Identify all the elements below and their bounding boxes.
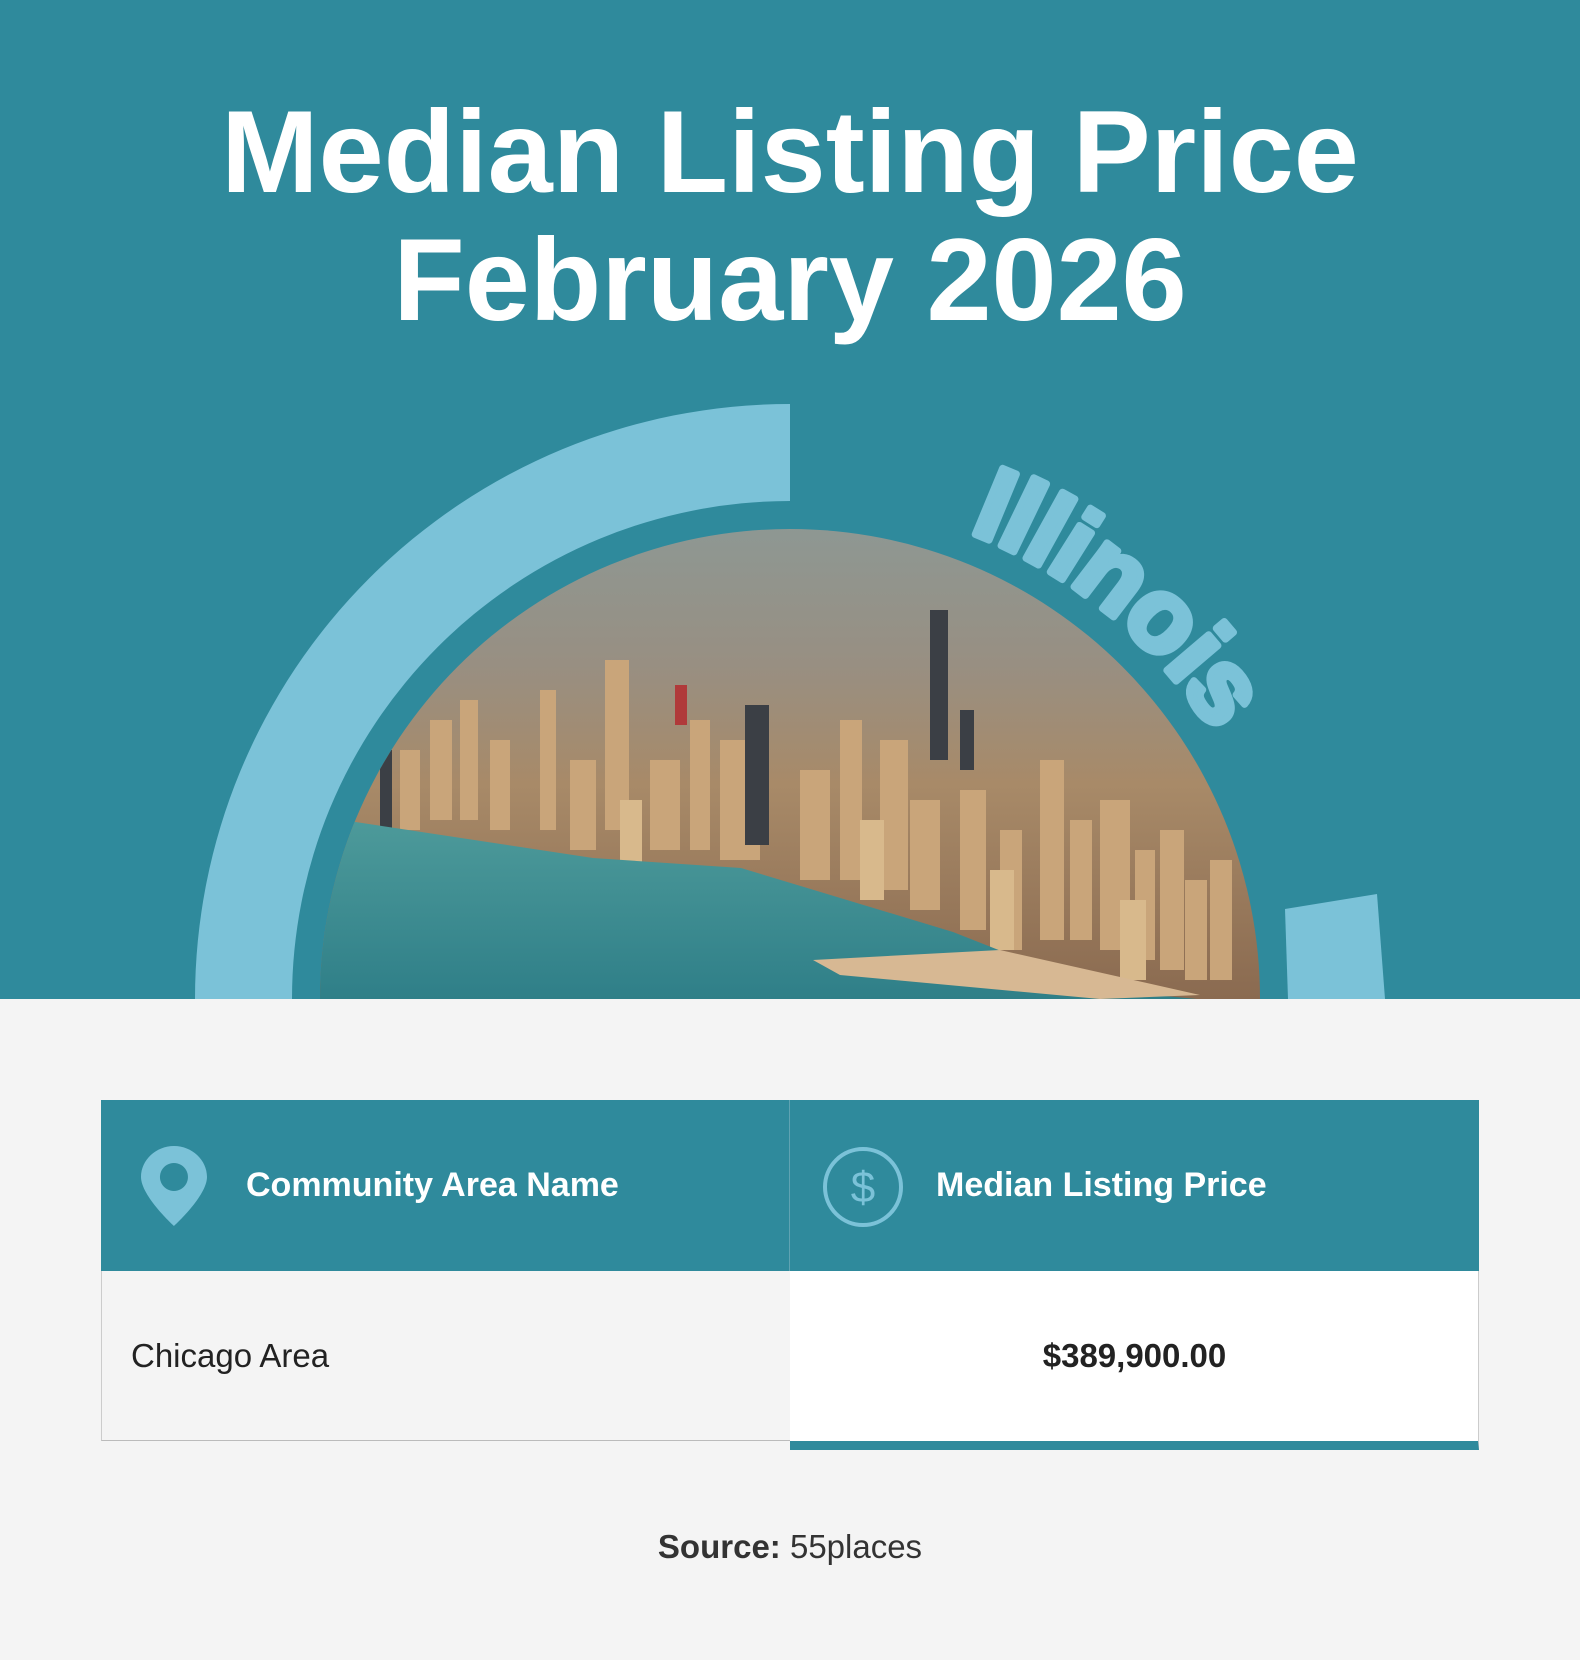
cell: Chicago Area [101, 1271, 790, 1441]
header text: Community Area Name [246, 1166, 619, 1204]
arc ring left [195, 404, 790, 999]
header band [0, 0, 1580, 999]
source: Source: 55places [658, 1528, 922, 1565]
header: community area name [101, 1100, 790, 1271]
table [101, 1100, 1479, 1450]
header: median listing price [790, 1100, 1479, 1271]
photo: Chicago skyline [300, 520, 1280, 1000]
header text: Median Listing Price [936, 1166, 1267, 1204]
hero graphic [195, 404, 1385, 999]
Illinois label: Illinois [972, 464, 1253, 726]
cell: Chicago Area: Chicago Area [131, 1337, 329, 1374]
title [221, 86, 1359, 345]
title: February 2026 [393, 214, 1187, 345]
arc ring right segment [1285, 894, 1385, 999]
icon: dollar coin: $ [851, 1163, 875, 1212]
cell: price [790, 1271, 1479, 1450]
cell: price: $389,900.00 [1043, 1337, 1226, 1374]
icon: dollar coin [823, 1147, 903, 1227]
icon: map pin [141, 1146, 207, 1226]
title: Median Listing Price [221, 86, 1359, 217]
